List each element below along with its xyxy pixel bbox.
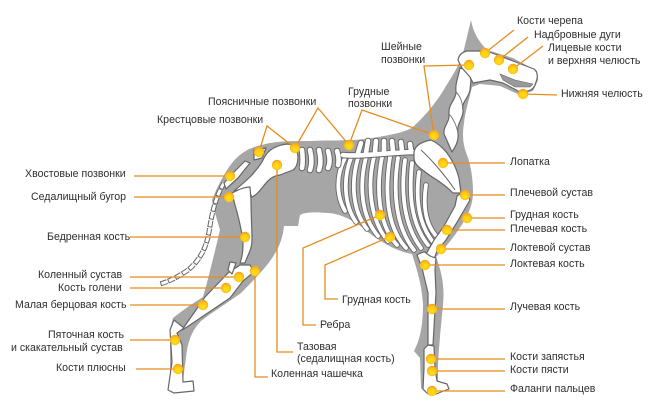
- labels: Малая берцовая кость: [15, 299, 127, 311]
- labels: Кости плюсны: [56, 362, 126, 374]
- labels: Плечевая кость: [510, 223, 588, 235]
- labels: и верхняя челюсть: [548, 55, 641, 67]
- labels: Крестцовые позвонки: [157, 114, 263, 126]
- labels: Лопатка: [510, 156, 550, 168]
- labels: Хвостовые позвонки: [25, 168, 126, 180]
- leader lines: [130, 30, 557, 391]
- labels: и скакательный сустав: [11, 342, 123, 354]
- labels: Кости запястья: [510, 351, 585, 363]
- labels: Грудная кость: [342, 294, 411, 306]
- patella: [228, 262, 236, 274]
- labels: Кость голени: [58, 282, 122, 294]
- femur: [232, 187, 252, 263]
- labels: Пяточная кость: [48, 329, 124, 341]
- labels: Локтевая кость: [510, 258, 585, 270]
- labels: Плечевой сустав: [510, 187, 593, 199]
- labels: Лицевые кости: [548, 42, 622, 54]
- labels: Седалищный бугор: [31, 191, 126, 203]
- scapula: [414, 140, 461, 193]
- labels: Бедренная кость: [47, 231, 131, 243]
- tail: [160, 183, 224, 284]
- labels: (седалищная кость): [297, 353, 395, 365]
- labels: Тазовая: [297, 341, 337, 353]
- labels: Коленная чашечка: [271, 368, 363, 380]
- pelvis: [234, 144, 298, 197]
- labels: Коленный сустав: [38, 269, 122, 281]
- labels: Кости черепа: [517, 15, 583, 27]
- caudal vertebrae: [224, 161, 250, 189]
- ulna and radius: [417, 252, 436, 345]
- hind foot: [168, 320, 194, 393]
- thoracic and lumbar spine: [302, 141, 418, 170]
- labels: позвонки: [348, 98, 392, 110]
- ribs: [338, 157, 438, 250]
- humerus: [425, 192, 470, 259]
- joint markers: [170, 48, 528, 396]
- labels: Локтевой сустав: [510, 242, 591, 254]
- labels: позвонки: [381, 54, 425, 66]
- teeth region: [500, 74, 533, 87]
- front paw: [423, 345, 449, 394]
- skull: [458, 51, 537, 92]
- labels: Фаланги пальцев: [510, 383, 596, 395]
- labels: Грудные: [348, 86, 390, 98]
- labels: Поясничные позвонки: [208, 96, 316, 108]
- labels: Нижняя челюсть: [561, 88, 643, 100]
- dog body silhouette: [170, 20, 538, 393]
- labels: Ребра: [320, 319, 350, 331]
- labels: Шейные: [381, 41, 422, 53]
- labels: Надбровные дуги: [534, 29, 621, 41]
- skeleton: [168, 51, 537, 394]
- tibia: [182, 265, 254, 330]
- labels: Грудная кость: [510, 209, 579, 221]
- labels: Кости пясти: [510, 364, 569, 376]
- sacral vertebra: [254, 148, 266, 160]
- neck vertebrae: [444, 68, 471, 152]
- labels: Лучевая кость: [510, 301, 581, 313]
